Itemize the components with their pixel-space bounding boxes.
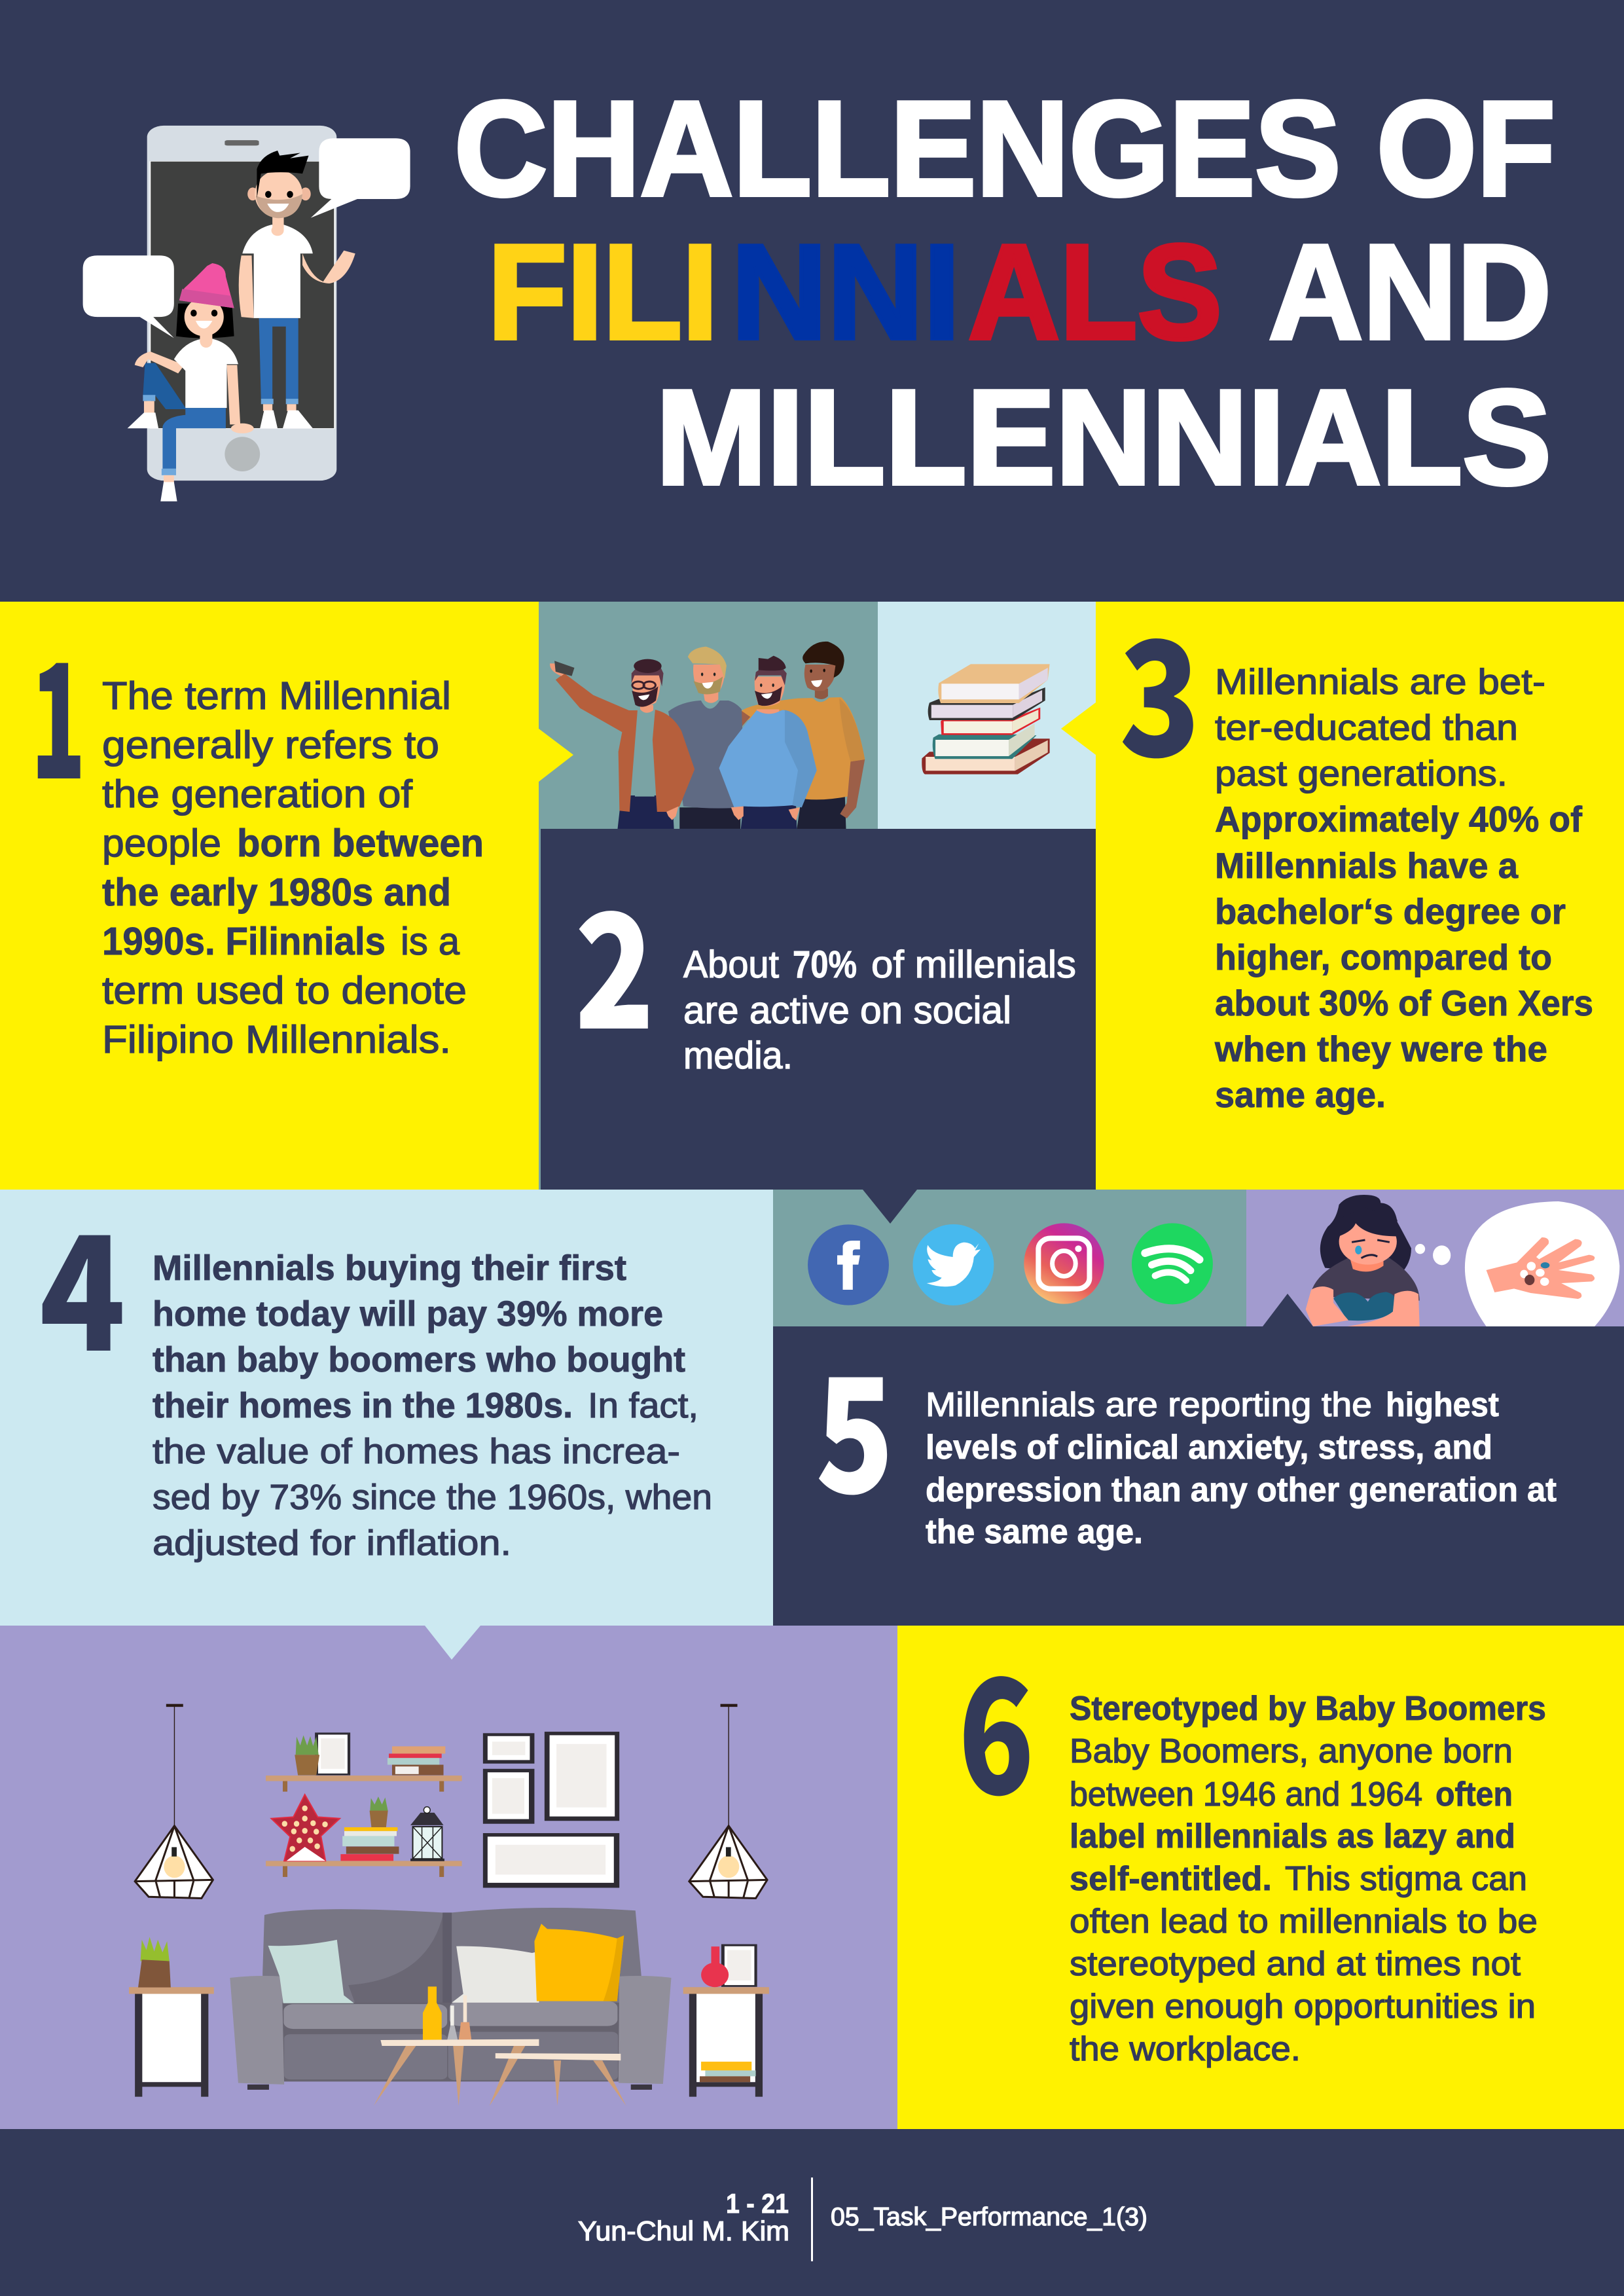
title: AND: [1269, 217, 1551, 367]
panel 3 text: ter-educated than: [1215, 707, 1518, 748]
panel 4 text: than baby boomers who bought: [153, 1340, 685, 1379]
panel: books illustration background: [878, 602, 1096, 829]
panel 6 text: the workplace.: [1070, 2030, 1301, 2068]
panel 4 background: [0, 1190, 773, 1626]
icon: instagram: [1024, 1223, 1104, 1304]
wall shelves: [266, 1732, 462, 1877]
footer author text: [578, 2188, 789, 2246]
number 3: 3: [1119, 572, 1200, 802]
number 1: 1: [31, 594, 86, 824]
panel 1 text: is a: [401, 920, 460, 963]
panel 6 text: label millennials as lazy and: [1070, 1817, 1515, 1855]
panel 3 text: Approximately 40% of: [1215, 799, 1583, 839]
icon: facebook: [808, 1224, 889, 1305]
panel 2 background: [539, 829, 1096, 1190]
illustration: group of friends taking a selfie: [550, 642, 865, 829]
panel 6 text: Baby Boomers, anyone born: [1070, 1732, 1513, 1770]
left speech bubble: [83, 255, 174, 338]
icon: twitter: [912, 1224, 994, 1305]
title: [454, 73, 1555, 513]
phone body: [147, 126, 336, 481]
panel 4 text: [153, 1248, 712, 1563]
right speech bubble: [311, 138, 410, 218]
panel 2 text: of millenials: [871, 943, 1076, 986]
panel 6 background: [897, 1626, 1624, 2129]
panel 3 text: [1214, 661, 1593, 1115]
panel 2 text: [683, 943, 1076, 1077]
panel 6 text: This stigma can: [1285, 1860, 1527, 1898]
arrow: panel 1 pointer: [539, 729, 573, 782]
illustration: stack of books: [922, 664, 1050, 774]
panel 4 text: their homes in the 1980s.: [153, 1386, 573, 1425]
title: CHALLENGES OF: [454, 73, 1555, 224]
illustration: anxious woman thinking about pills: [1306, 1195, 1619, 1326]
number 4: 4: [39, 1166, 126, 1396]
panel 6 text: Stereotyped by Baby Boomers: [1070, 1690, 1546, 1728]
footer author text: 1 - 21: [726, 2188, 789, 2219]
wall picture frames: [483, 1732, 619, 1887]
illustration: phone with two people: [83, 126, 410, 501]
panel 4 text: sed by 73% since the 1960s, when: [153, 1478, 712, 1517]
arrow: panel 3 pointer: [1061, 702, 1096, 755]
illustration: living room: [129, 1704, 769, 2105]
friend in blue sweater: [719, 656, 817, 829]
social media icons: [808, 1223, 1213, 1305]
panel 1 text: 1990s. Filinnials: [102, 920, 386, 963]
panel 6 text: given enough opportunities in: [1070, 1988, 1536, 2026]
footer divider: [811, 2178, 813, 2261]
right pendant lamp: [689, 1704, 767, 1899]
left side table with plant: [129, 1937, 214, 2097]
panel 3 text: Millennials are bet-: [1215, 661, 1545, 702]
phone screen: [150, 161, 334, 428]
title: NNI: [731, 217, 960, 367]
panel 3 text: bachelor‘s degree or: [1215, 891, 1566, 932]
panel: social media icons background: [773, 1190, 1246, 1326]
footer task label: 05_Task_Performance_1(3): [831, 2203, 1147, 2231]
panel 1 text: the early 1980s and: [102, 871, 451, 914]
panel 5 text: the same age.: [926, 1513, 1143, 1551]
title: MILLENNIALS: [656, 362, 1551, 513]
panel 6 text: between 1946 and 1964: [1070, 1776, 1422, 1813]
number 5: 5: [816, 1308, 894, 1539]
panel 1 text: generally refers to: [102, 723, 439, 767]
panel 3 text: same age.: [1215, 1074, 1386, 1115]
friend in grey sweater: [668, 647, 746, 829]
panel 5 text: Millennials are reporting the: [926, 1386, 1372, 1424]
panel 6 text: often lead to millennials to be: [1070, 1903, 1538, 1941]
panel 1 text: people: [102, 822, 221, 865]
panel 3 background: [1096, 602, 1624, 1190]
panel 6 text: [1070, 1690, 1546, 2068]
arrow: panel 4 pointer: [425, 1626, 480, 1660]
panel 1 text: Filipino Millennials.: [102, 1018, 451, 1061]
number 2: 2: [575, 844, 655, 1074]
panel 1 text: [102, 674, 484, 1061]
footer author text: Yun-Chul M. Kim: [578, 2215, 789, 2246]
panel: selfie illustration background: [539, 602, 878, 829]
panel 3 text: past generations.: [1215, 753, 1507, 793]
thought bubble with pills: [1465, 1201, 1619, 1326]
man figure: [239, 151, 355, 428]
panel 6 text: self-entitled.: [1070, 1860, 1272, 1898]
panel 4 text: the value of homes has increa-: [153, 1432, 680, 1471]
footer panel: [0, 2129, 1624, 2296]
panel 2 text: media.: [683, 1034, 793, 1077]
panel 5 text: depression than any other generation at: [926, 1471, 1557, 1509]
right side table with vase, frame and books: [683, 1944, 769, 2097]
panel 5 text: levels of clinical anxiety, stress, and: [926, 1429, 1492, 1467]
arrow: panel 2 pointer: [863, 1190, 917, 1224]
header panel: [0, 0, 1624, 602]
title: ALS: [968, 217, 1222, 367]
panel 4 text: In fact,: [588, 1386, 698, 1425]
friend in yellow sweater: [716, 642, 865, 829]
panel 5 text: [926, 1386, 1557, 1551]
panel: anxious woman background: [1246, 1190, 1624, 1326]
panel 5 text: highest: [1386, 1386, 1499, 1424]
panel 6 text: often: [1435, 1776, 1513, 1813]
panel 1 text: The term Millennial: [102, 674, 451, 718]
panel 4 text: Millennials buying their first: [153, 1248, 626, 1288]
panel 3 text: higher, compared to: [1215, 937, 1552, 977]
icon: spotify: [1132, 1223, 1213, 1304]
panel 1 background: [0, 602, 539, 1190]
panel 5 background: [773, 1326, 1624, 1626]
friend holding a phone: [550, 659, 695, 829]
panel 3 text: Millennials have a: [1215, 845, 1518, 886]
title: FILI: [488, 217, 718, 367]
panel 2 text: 70%: [793, 943, 857, 986]
arrow: panel 5 pointer: [1263, 1294, 1313, 1326]
woman figure: [128, 263, 254, 501]
number 6: 6: [958, 1609, 1034, 1840]
thought dots: [1415, 1244, 1451, 1265]
panel 2 text: About: [683, 943, 779, 986]
panel 1 text: born between: [237, 822, 484, 865]
panel 6 text: stereotyped and at times not: [1070, 1945, 1521, 1983]
panel 4 text: adjusted for inflation.: [153, 1523, 511, 1563]
panel 3 text: about 30% of Gen Xers: [1215, 983, 1593, 1023]
coffee tables with bottle and candles: [374, 1986, 626, 2105]
panel 2 text: are active on social: [683, 989, 1011, 1032]
panel: living room background: [0, 1626, 897, 2129]
left pendant lamp: [135, 1704, 213, 1899]
panel 1 text: the generation of: [102, 773, 413, 816]
sofa: [230, 1908, 671, 2090]
panel 3 text: when they were the: [1214, 1029, 1547, 1069]
panel 1 text: term used to denote: [102, 969, 467, 1012]
panel 4 text: home today will pay 39% more: [153, 1294, 663, 1334]
